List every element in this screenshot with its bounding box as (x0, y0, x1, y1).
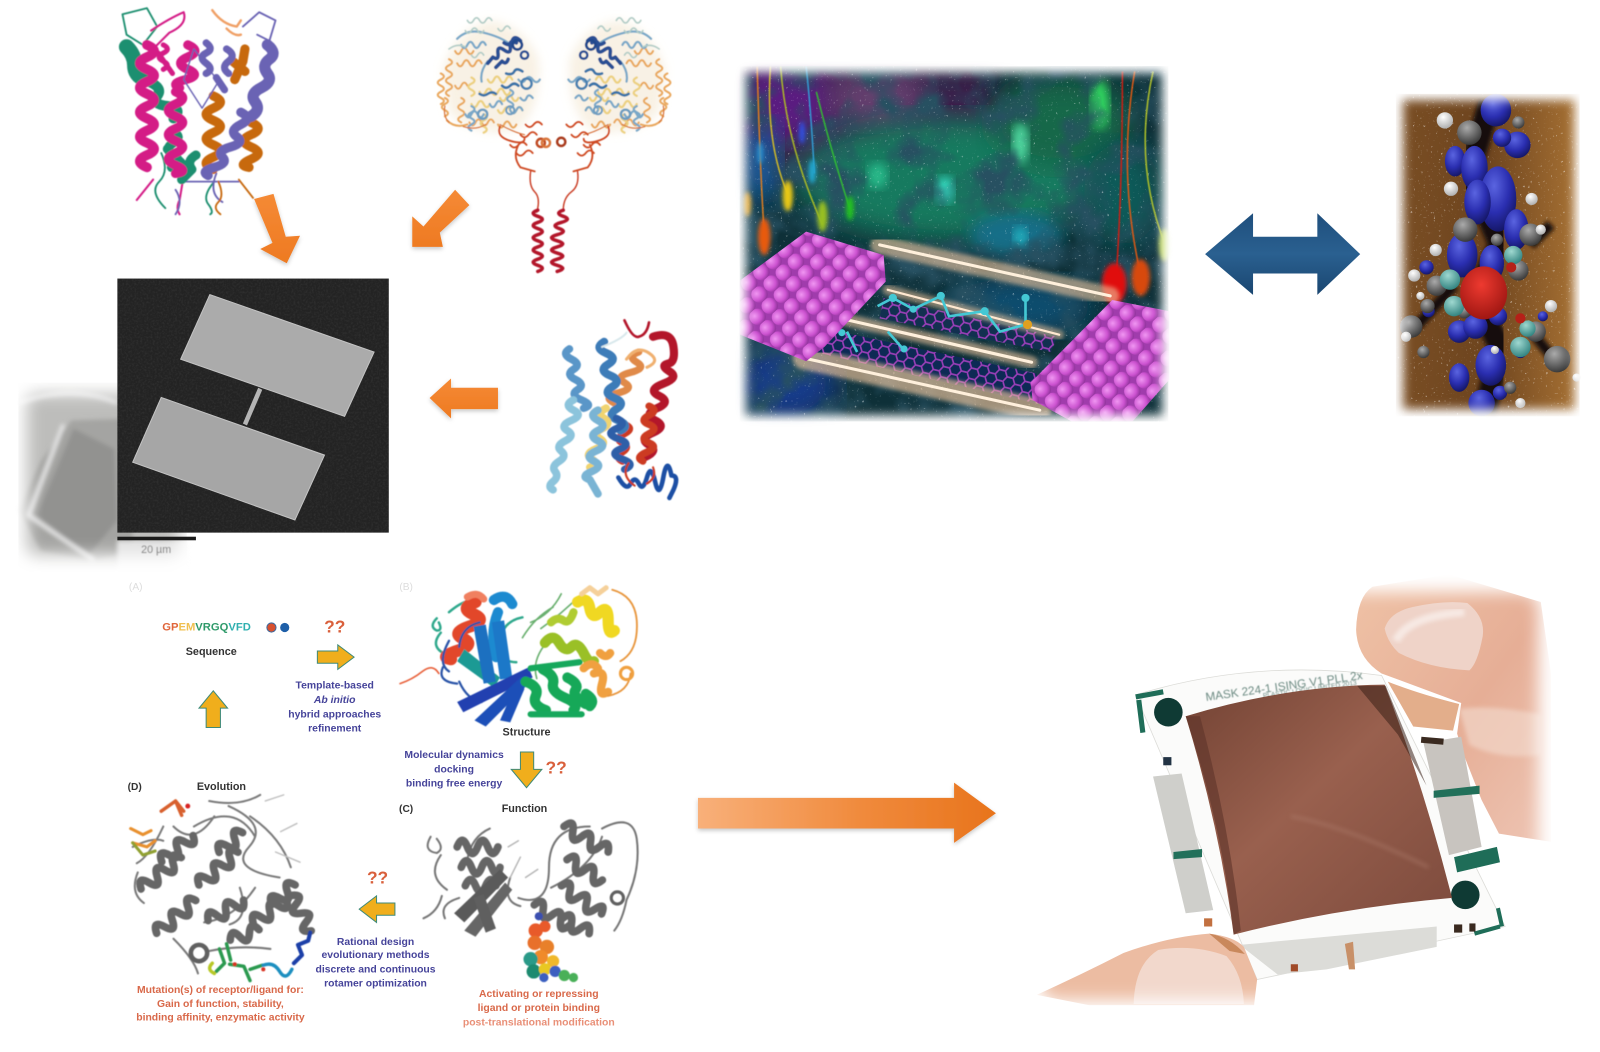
heading: evolution: Evolution (197, 781, 246, 793)
heading: structure: Structure (503, 727, 551, 739)
protein: dimeric receptor with coiled tails (438, 18, 670, 271)
panel letter B: (B) (399, 582, 413, 593)
upper plate (181, 295, 374, 416)
arrow: from ion channel to device (254, 194, 300, 263)
teal atoms (1440, 246, 1536, 357)
large arrow: computation to flexible device (698, 783, 996, 843)
methods: structure prediction (288, 681, 381, 735)
photo: flexible electronic chip held between fingers (1037, 574, 1551, 1005)
methods: protein design: evolutionary methods (322, 950, 430, 961)
panel letter C: (C) (399, 804, 413, 815)
methods: protein design: rotamer optimization (324, 979, 427, 990)
methods: function prediction: binding free energy (406, 779, 503, 790)
amino acid sequence: GPEMVRGQVFD (162, 622, 251, 634)
arrow: from receptor to device (412, 190, 469, 247)
red oxygen atom (1460, 266, 1507, 319)
methods: structure prediction: Ab initio (313, 695, 356, 706)
graphene sheets (814, 329, 1039, 404)
panel letter D: (D) (128, 782, 142, 793)
methods: structure prediction: Template-based (296, 681, 374, 692)
methods: structure prediction: hybrid approaches (288, 709, 381, 720)
heading: sequence: Sequence (186, 646, 237, 658)
outcomes: evolution: Gain of function, stability, (157, 999, 284, 1010)
question marks: sequence to structure: ?? (324, 617, 345, 637)
blue orbital lobes (1419, 94, 1548, 416)
SEM image: suspended rectangular plates (117, 279, 389, 533)
question marks: function to evolution: ?? (367, 868, 388, 888)
mask label on the film: PLASTIC LOGIC LIMITED 2013 (1263, 680, 1358, 700)
fingertip over the sheet edge (1388, 682, 1459, 731)
protein: gray structure with bound ligand (423, 821, 638, 982)
molecule chain (838, 292, 1032, 353)
methods: protein design (315, 937, 436, 990)
colored light streaks (757, 66, 1165, 275)
dark backbone (1469, 102, 1500, 413)
protein: transmembrane helix bundle (550, 320, 676, 498)
double-headed arrow (1205, 213, 1360, 295)
gray contact pads (1153, 737, 1500, 974)
arrow: structure to function (511, 752, 542, 788)
image: molecular orbital model (1396, 94, 1581, 416)
methods: function prediction: docking (434, 764, 474, 775)
right electrode: stacked spheres (1031, 300, 1169, 421)
panel: sequence-structure-function-evolution cycle (128, 582, 638, 1028)
scale bar (117, 537, 196, 556)
heading: function: Function (502, 803, 547, 815)
outcomes: evolution (136, 985, 305, 1023)
methods: function prediction (404, 750, 504, 790)
arrow: sequence to structure (317, 645, 354, 669)
transparent film (1136, 670, 1505, 980)
left electrode: stacked spheres (740, 232, 886, 361)
thumb and hand behind the film (1356, 574, 1551, 842)
methods: structure prediction: refinement (308, 724, 362, 735)
brown active matrix area (1186, 685, 1452, 935)
bottom finger (1037, 934, 1257, 1005)
outcomes: function: Activating or repressing (479, 989, 599, 1000)
connecting neck (243, 388, 262, 425)
question marks: structure to function: ?? (546, 757, 567, 777)
outcomes: evolution: binding affinity, enzymatic activity (136, 1012, 305, 1023)
glowing nanowires (796, 245, 1110, 410)
corner alignment marks (1136, 692, 1502, 971)
methods: function prediction: Molecular dynamics (404, 750, 504, 761)
outcomes: function: ligand or protein binding (478, 1003, 600, 1014)
protein: gray structure with mutated side chains (131, 795, 317, 981)
glowing droplets (743, 121, 1171, 304)
lower plate (133, 397, 325, 520)
protein: rainbow colored structure (400, 588, 637, 727)
gray carbon atoms (1400, 116, 1570, 394)
image: quantum dot nanotube device (735, 61, 1171, 423)
faded photo: gray device behind SEM image (18, 383, 189, 571)
protein: ion channel tetramer (122, 8, 276, 214)
outcomes: function: post-translational modification (463, 1017, 615, 1028)
arrow: function to evolution (359, 896, 395, 922)
panel letter A: (A) (129, 582, 143, 593)
nebula background (735, 61, 1168, 423)
mutation dots (267, 623, 289, 632)
arrow: evolution to sequence (199, 691, 228, 728)
outcomes: function (463, 989, 615, 1028)
scale bar: 20 µm (141, 544, 171, 556)
arrow: from GPCR to device (430, 379, 498, 418)
white hydrogen atoms (1401, 112, 1581, 408)
methods: protein design: Rational design (337, 937, 414, 948)
outcomes: evolution: Mutation(s) of receptor/ligand for: (137, 985, 304, 996)
mask label on the film: MASK 224-1 ISING V1 PLL 2x (1205, 669, 1364, 704)
methods: protein design: discrete and continuous (315, 964, 436, 975)
